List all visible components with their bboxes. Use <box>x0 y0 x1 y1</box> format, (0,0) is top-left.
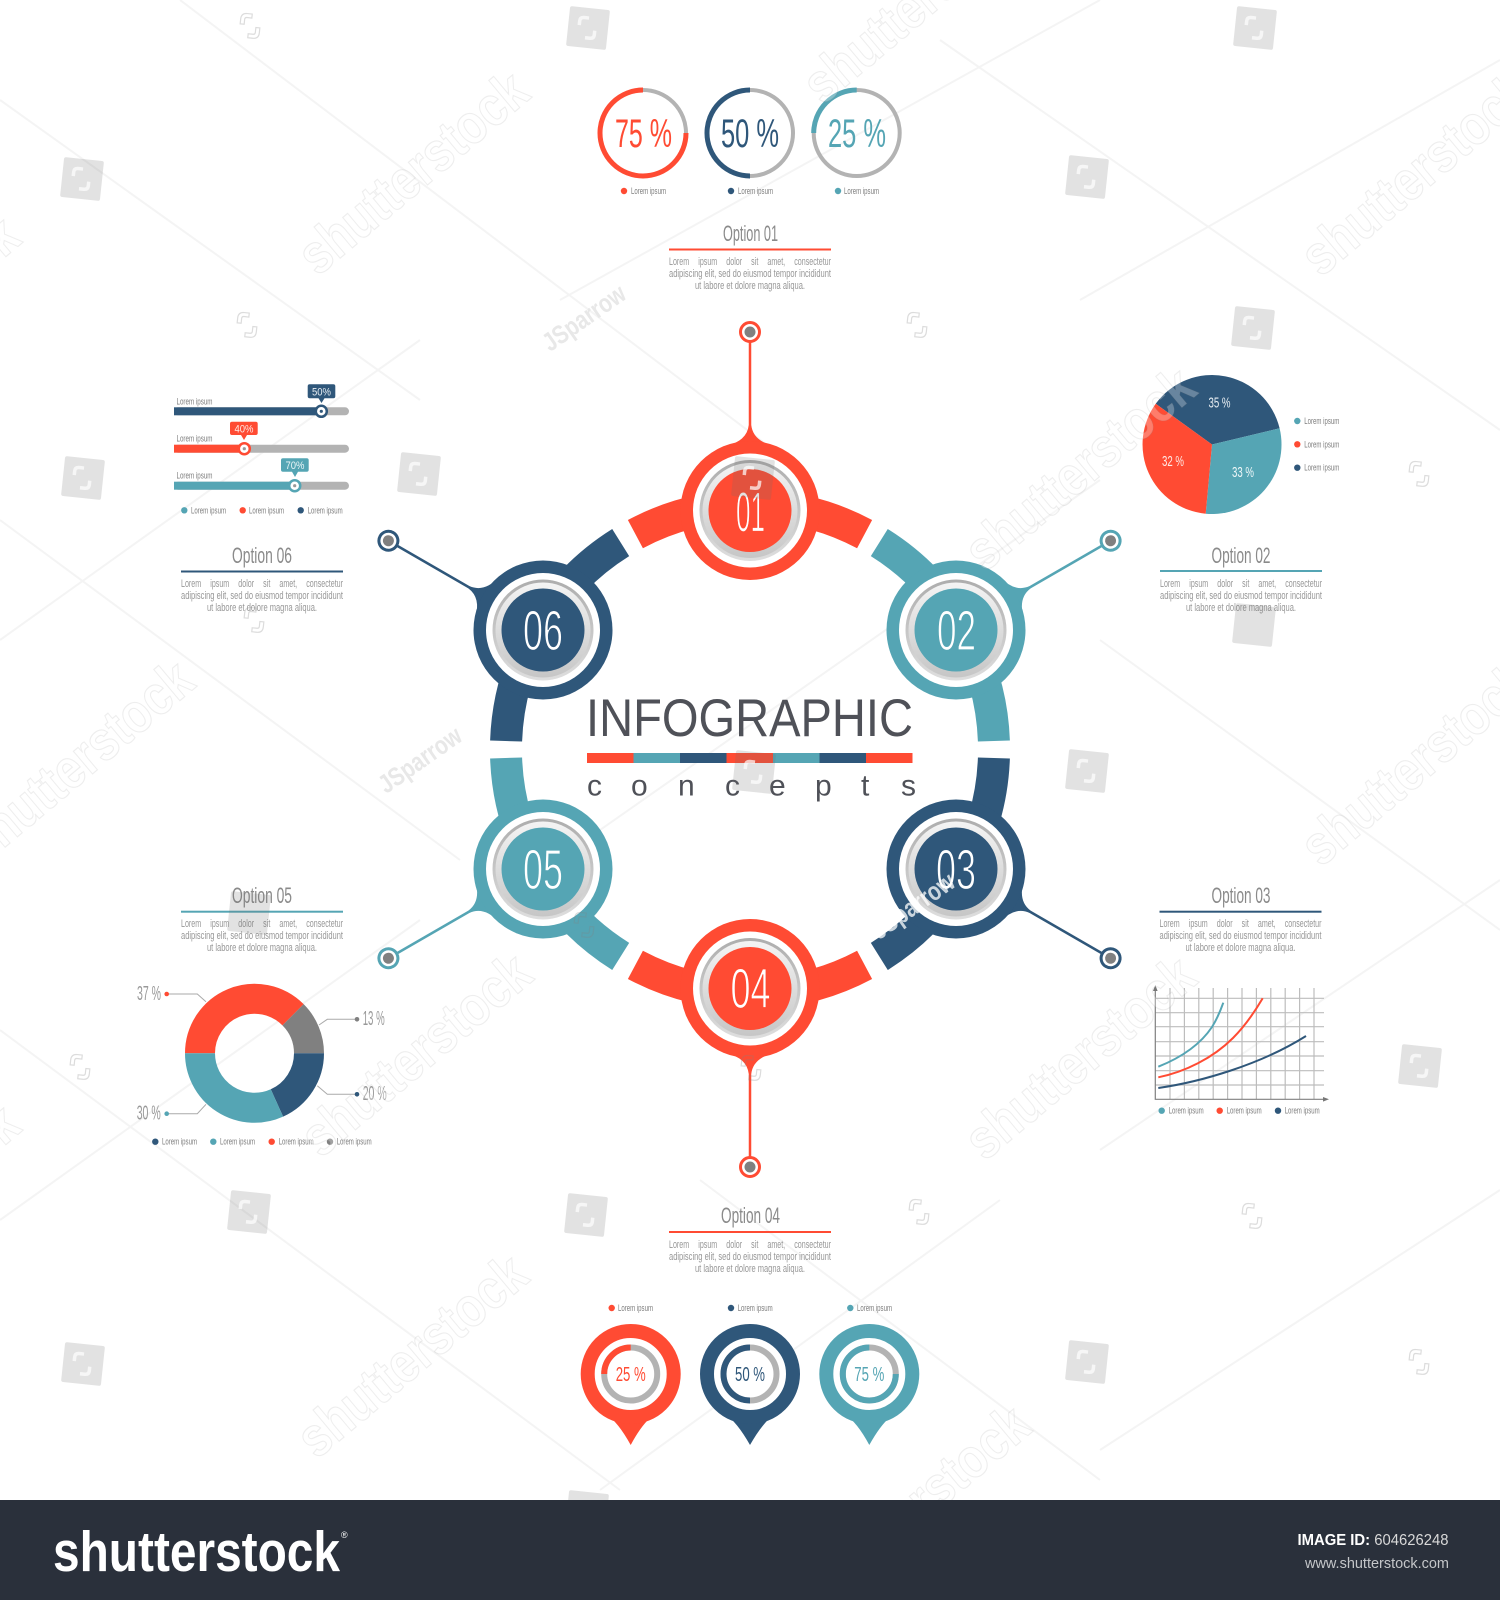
text block: option 03: ut labore et dolore magna aliqua. <box>1186 942 1296 954</box>
donut legend: Lorem ipsum <box>337 1137 372 1147</box>
pie legend: Lorem ipsum <box>1304 416 1339 426</box>
panel: option 02 pie chart: 32 % <box>1162 453 1184 470</box>
ring segment 05 <box>506 758 621 956</box>
chart legend: Lorem ipsum <box>1169 1106 1204 1116</box>
ring 50%: Lorem ipsum <box>738 186 773 196</box>
bar 40%: 40% <box>234 424 254 436</box>
footer website: www.shutterstock.com <box>1304 1555 1449 1572</box>
bars legend: Lorem ipsum <box>249 505 284 515</box>
footer registered mark: ® <box>341 1530 348 1540</box>
panel: option 03 line chart <box>1153 985 1329 1116</box>
text block: option 03 <box>1160 883 1322 954</box>
pie legend <box>1294 416 1339 473</box>
text block: option 05: adipiscing elit, sed do eiusmod tempor incididunt <box>181 930 343 942</box>
node 03 with connector: 03 <box>936 838 976 902</box>
node 06 with connector: 06 <box>523 599 563 663</box>
stock watermark overlay: shutterstock <box>952 942 1207 1171</box>
text block: option 02: ut labore et dolore magna aliqua. <box>1186 602 1296 614</box>
stock watermark overlay: JSparrow <box>865 866 961 945</box>
chart axes <box>1153 985 1329 1102</box>
panel: option 05 donut chart: 13 % <box>363 1008 385 1030</box>
text block: option 05: Option 05 <box>232 883 292 908</box>
pie legend: Lorem ipsum <box>1304 439 1339 449</box>
bar 70%: Lorem ipsum <box>176 470 212 480</box>
text block: option 03: adipiscing elit, sed do eiusmod tempor incididunt <box>1160 930 1322 942</box>
ring segment 02 <box>879 543 994 741</box>
pin 50%: Lorem ipsum <box>738 1303 773 1313</box>
navy curve <box>1158 1036 1306 1088</box>
panel: option 04 map pins <box>588 1303 912 1445</box>
node 01 with connector: 01 <box>736 480 765 544</box>
text block: option 01: Lorem ipsum dolor sit amet, consectetur <box>669 256 831 268</box>
node 04 with connector <box>680 919 820 1176</box>
ring segment 03 <box>879 758 994 956</box>
text block: option 06: adipiscing elit, sed do eiusmod tempor incididunt <box>181 590 343 602</box>
donut callout 37%: 37 % <box>137 983 161 1005</box>
donut callout 37% <box>137 983 206 1005</box>
node 05 with connector: 05 <box>523 838 563 902</box>
text block: option 01: ut labore et dolore magna aliqua. <box>695 280 805 292</box>
text block: option 05: Lorem ipsum dolor sit amet, consectetur <box>181 918 343 930</box>
donut legend <box>152 1137 372 1147</box>
pin 50% <box>707 1303 793 1445</box>
text block: option 01: Option 01 <box>723 221 778 246</box>
text block: option 03: Lorem ipsum dolor sit amet, consectetur <box>1160 918 1322 930</box>
footer logo: shutterstock <box>53 1520 340 1584</box>
panel: option 02 pie chart: 35 % <box>1208 394 1230 412</box>
text block: option 04 <box>669 1203 831 1275</box>
stock watermark overlay: JSparrow <box>372 720 468 799</box>
donut callout 20% <box>317 1083 387 1105</box>
ring 25%: Lorem ipsum <box>844 186 879 196</box>
donut legend: Lorem ipsum <box>279 1137 314 1147</box>
pin 75% <box>826 1303 912 1445</box>
ring segment 01 <box>635 506 865 534</box>
teal curve <box>1158 1003 1223 1067</box>
ring 75% <box>600 90 686 196</box>
bar 40% <box>174 422 349 454</box>
footer bar <box>0 1500 1500 1600</box>
ring 75%: 75 % <box>615 112 672 156</box>
text block: option 01 <box>669 221 831 292</box>
text block: option 02: adipiscing elit, sed do eiusmod tempor incididunt <box>1160 590 1322 602</box>
ring 25%: 25 % <box>828 112 886 156</box>
donut callout 30%: 30 % <box>137 1102 161 1124</box>
panel: option 02 pie chart <box>1143 375 1339 514</box>
stock watermark overlay: shutterstock <box>288 939 543 1168</box>
donut callout 30% <box>137 1102 206 1124</box>
stock watermark overlay: shutterstock <box>284 1240 539 1469</box>
ring 75%: Lorem ipsum <box>631 186 666 196</box>
pin 75%: Lorem ipsum <box>857 1303 892 1313</box>
chart grid <box>1155 988 1324 1099</box>
text block: option 04: Lorem ipsum dolor sit amet, consectetur <box>669 1239 831 1251</box>
text block: option 06: Option 06 <box>232 543 292 568</box>
donut segments <box>200 999 309 1108</box>
bar 50%: 50% <box>312 386 331 398</box>
bar 50%: Lorem ipsum <box>176 396 212 406</box>
stock watermark overlay: JSparrow <box>536 278 632 357</box>
text block: option 06: Lorem ipsum dolor sit amet, consectetur <box>181 578 343 590</box>
panel: option 01 top progress rings <box>600 90 900 196</box>
panel: option 05 donut chart <box>137 983 387 1147</box>
pie slices <box>1143 375 1282 514</box>
bars legend <box>181 505 343 515</box>
pin 25%: 25 % <box>616 1364 646 1386</box>
text block: option 04: ut labore et dolore magna aliqua. <box>695 1263 805 1275</box>
stock watermark overlay: shutterstock <box>952 353 1207 582</box>
chart legend: Lorem ipsum <box>1285 1106 1320 1116</box>
bar 70%: 70% <box>286 460 305 472</box>
text block: option 02 <box>1160 543 1322 614</box>
bar 50% <box>174 384 349 417</box>
ring 50%: 50 % <box>721 112 779 156</box>
bar 40%: Lorem ipsum <box>176 434 212 444</box>
text block: option 02: Lorem ipsum dolor sit amet, consectetur <box>1160 578 1322 590</box>
node 04 with connector: 04 <box>730 957 770 1021</box>
donut legend: Lorem ipsum <box>220 1137 255 1147</box>
panel: option 06 progress bars <box>174 384 349 515</box>
text block: option 04: adipiscing elit, sed do eiusmod tempor incididunt <box>669 1251 831 1263</box>
subtitle: concepts: concepts <box>587 770 916 802</box>
node 02 with connector <box>886 515 1131 700</box>
node 05 with connector <box>368 800 612 984</box>
ring segment 04 <box>635 965 865 993</box>
ring 25% <box>814 90 900 196</box>
text block: option 03: Option 03 <box>1212 883 1270 908</box>
text block: option 05 <box>181 883 343 954</box>
text block: option 04: Option 04 <box>721 1203 780 1228</box>
pin 50%: 50 % <box>735 1364 765 1386</box>
donut callout 20%: 20 % <box>363 1083 387 1105</box>
chart legend: Lorem ipsum <box>1227 1106 1262 1116</box>
node 06 with connector <box>368 515 612 700</box>
panel: option 02 pie chart: 33 % <box>1232 464 1254 481</box>
pin 25%: Lorem ipsum <box>618 1303 653 1313</box>
stock watermark overlay: shutterstock <box>285 57 540 286</box>
text block: option 06 <box>181 543 343 614</box>
pin 25% <box>588 1303 674 1445</box>
red curve <box>1158 998 1263 1077</box>
center title <box>586 689 916 802</box>
multicolor divider <box>587 753 912 763</box>
node 03 with connector <box>886 800 1131 984</box>
text block: option 05: ut labore et dolore magna aliqua. <box>207 942 317 954</box>
pie legend: Lorem ipsum <box>1304 463 1339 473</box>
ring segment 06 <box>506 543 621 741</box>
donut legend: Lorem ipsum <box>162 1137 197 1147</box>
bars legend: Lorem ipsum <box>308 505 343 515</box>
node 02 with connector: 02 <box>937 599 976 663</box>
text block: option 01: adipiscing elit, sed do eiusmod tempor incididunt <box>669 268 831 280</box>
bars legend: Lorem ipsum <box>191 505 226 515</box>
title: INFOGRAPHIC: INFOGRAPHIC <box>586 689 913 748</box>
text block: option 06: ut labore et dolore magna aliqua. <box>207 602 317 614</box>
bar 70% <box>174 458 349 491</box>
ring 50% <box>707 90 793 196</box>
footer image id: IMAGE ID: 604626248 <box>1298 1532 1449 1549</box>
donut callout 13% <box>319 1008 385 1030</box>
node 01 with connector <box>680 322 820 580</box>
chart legend <box>1158 1106 1320 1116</box>
pin 75%: 75 % <box>854 1364 884 1386</box>
text block: option 02: Option 02 <box>1212 543 1270 568</box>
